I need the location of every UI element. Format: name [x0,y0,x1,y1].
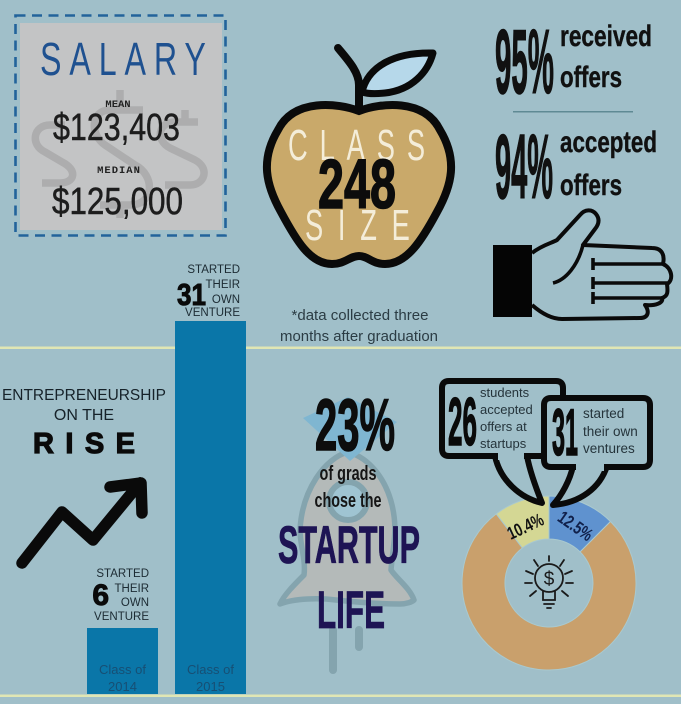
value: mean salary: $123,403 [53,107,180,149]
heading: entrepreneurship on the rise: ENTREPRENEURSHIP [2,387,166,404]
heading: salary: SALARY [40,34,206,85]
stat: 23% chose the startup life: STARTUP [278,516,420,575]
callout: 26 students: 26 [448,384,477,460]
text: class: CLASS [288,120,425,170]
bar label: 31 started their own venture: STARTED [187,264,240,276]
text: size: SIZE [305,200,410,250]
bar: class of 2014: Class of [99,662,146,677]
stat: 95% received offers: offers [560,61,622,94]
bar label: 6 started their own venture: 6 [92,579,109,612]
heading: entrepreneurship on the rise: RISE [33,428,135,460]
bar chart: ventures started [87,264,246,694]
icon: hand [493,210,671,319]
bar label: 31 started their own venture: OWN [212,294,240,306]
callout: 31 ventures [544,395,650,505]
bar: class of 2015: 2015 [196,679,225,694]
callout: 31 ventures: started [583,406,624,421]
bar label: 6 started their own venture: OWN [121,597,149,609]
stat: 23% chose the startup life: chose the [314,490,382,512]
stat: 23% chose the startup life: 23% [315,385,395,466]
icon: light bulb [525,556,573,608]
bar label: 31 started their own venture: VENTURE [185,307,240,319]
panel: salary [16,16,226,236]
callout: 26 students: startups [480,436,527,451]
bar: class of 2014: 2014 [108,679,137,694]
bar label: 6 started their own venture: VENTURE [94,611,149,623]
callout: 31 ventures: ventures [583,441,635,456]
callout: 26 students: offers at [480,419,527,434]
stat: 95% received offers: received [560,20,652,53]
callout: 31 ventures: 31 [552,395,578,469]
stat: 23% chose the startup life: of grads [320,463,376,485]
donut chart: startup share [462,496,636,670]
bar: class of 2015 [175,321,246,694]
bar: class of 2015: Class of [187,662,234,677]
bar label: 6 started their own venture: STARTED [96,568,149,580]
bar label: 31 started their own venture [177,264,240,319]
bar label: 6 started their own venture [92,568,149,623]
callout: 31 ventures: their own [583,424,638,439]
decorative dollar signs [35,90,204,218]
stat: 94% accepted offers: offers [560,169,622,202]
value: median salary: $125,000 [52,181,183,223]
stat: 95% received offers: 95% [495,12,554,113]
label: 12.5%: 12.5% [554,507,597,545]
stat: 94% accepted offers: 94% [495,117,553,218]
icon: light bulb: $ [544,569,555,590]
callout: 26 students: students [480,385,530,400]
callout: 26 students: accepted [480,402,533,417]
icon: rising arrow [22,483,142,563]
stat: 23% chose the startup life: LIFE [317,581,385,640]
label: 10.4%: 10.4% [504,509,547,544]
note: data collection: months after graduation [280,328,438,345]
note: data collection [280,307,438,345]
note: data collection: *data collected three [292,307,428,324]
bar label: 6 started their own venture: THEIR [114,583,149,595]
icon: rocket with graduation cap [280,397,414,670]
icon: apple with class size [267,48,451,264]
heading: entrepreneurship on the rise [2,387,166,460]
label: mean: MEAN [105,99,131,111]
value: 248: 248 [318,145,396,223]
bar label: 31 started their own venture: 31 [177,277,206,312]
bar label: 31 started their own venture: THEIR [206,279,240,291]
label: median: MEDIAN [97,165,141,177]
heading: entrepreneurship on the rise: ON THE [54,407,114,424]
bar: class of 2014 [87,628,158,694]
stat: 23% chose the startup life [278,385,420,640]
callout: 26 students [442,381,563,503]
